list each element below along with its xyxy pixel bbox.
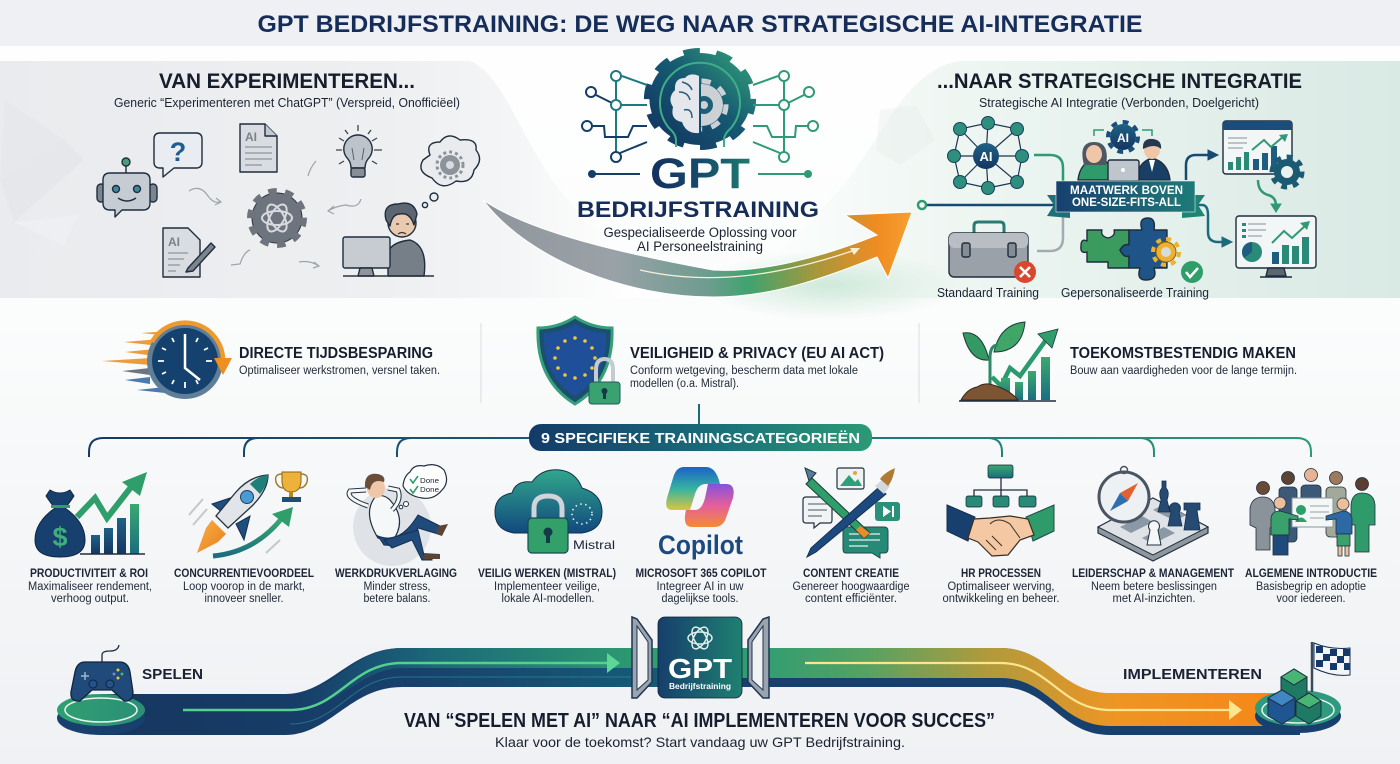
- heading: naar strategische integratie: ...NAAR STRATEGISCHE INTEGRATIE: [937, 70, 1302, 93]
- label: content creatie: CONTENT CREATIE: [803, 568, 899, 580]
- heading: veiligheid & privacy: VEILIGHEID & PRIVACY (EU AI ACT): [630, 345, 884, 362]
- text: veilig werken mistral: lokale AI-modellen.: [502, 593, 594, 605]
- label: algemene introductie: ALGEMENE INTRODUCTIE: [1245, 568, 1377, 580]
- icon: speech bubble: [154, 133, 202, 177]
- logo text: GPT: GPT: [650, 150, 750, 198]
- icon: document with pen: [163, 228, 215, 277]
- text: productiviteit & ROI: Maximaliseer rendement,: [28, 581, 152, 593]
- icon: org chart and handshake: [947, 465, 1054, 556]
- text: algemene introductie: voor iedereen.: [1276, 593, 1346, 605]
- category: hr processen: [942, 465, 1060, 605]
- platform: start: [57, 694, 145, 735]
- icon: blocks and flag: [1268, 642, 1350, 724]
- closing call to action: Klaar voor de toekomst? Start vandaag uw GPT Bedrijfstraining.: [495, 734, 905, 750]
- text: werkdrukverlaging: Minder stress,: [364, 581, 430, 593]
- title: GPT BEDRIJFSTRAINING: DE WEG NAAR STRATEGISCHE AI-INTEGRATIE: [258, 11, 1142, 38]
- gate panel: GPT: [668, 653, 732, 684]
- text: content creatie: [792, 581, 910, 605]
- banner: 9 specifieke trainingscategorieen: [529, 424, 872, 451]
- category: veilig werken mistral: [478, 470, 616, 605]
- gate: GPT bedrijfstraining: [632, 617, 769, 698]
- text: veiligheid & privacy: modellen (o.a. Mistral).: [630, 378, 739, 390]
- label: werkdrukverlaging: WERKDRUKVERLAGING: [335, 568, 457, 580]
- text: microsoft 365 copilot: Integreer AI in uw: [656, 581, 744, 593]
- banner: maatwerk boven one-size-fits-all: ONE-SIZE-FITS-ALL: [1072, 197, 1181, 209]
- icon: EU shield with lock: [538, 317, 620, 404]
- icon: dashboard with gear: [1223, 121, 1302, 187]
- banner: maatwerk boven one-size-fits-all: [1047, 181, 1205, 218]
- text: veilig werken mistral: Implementeer veilige,: [494, 581, 600, 593]
- icon: money bag with chart: $: [52, 522, 68, 552]
- label: leiderschap & management: LEIDERSCHAP & MANAGEMENT: [1072, 568, 1234, 580]
- icon: toolbox with cross: [949, 222, 1036, 283]
- category: content creatie: [792, 468, 910, 605]
- gate panel: Bedrijfstraining: [669, 682, 731, 691]
- text: werkdrukverlaging: betere balans.: [364, 593, 430, 605]
- logo tagline: Gespecialiseerde Oplossing voor: [604, 225, 797, 240]
- icon: group of people: [1250, 468, 1375, 556]
- text: productiviteit & ROI: verhoog output.: [51, 593, 129, 605]
- text: productiviteit & ROI: [28, 581, 152, 605]
- heading: toekomstbestendig maken: TOEKOMSTBESTENDIG MAKEN: [1070, 345, 1296, 362]
- benefits row: [102, 317, 1297, 404]
- label: productiviteit & ROI: PRODUCTIVITEIT & ROI: [30, 568, 148, 580]
- arrow: from experiment to integration: [483, 200, 912, 297]
- icon: team with AI gear: [1078, 122, 1170, 181]
- category: productiviteit & ROI: [28, 472, 152, 605]
- category: algemene introductie: [1245, 468, 1377, 605]
- text: concurrentievoordeel: innoveer sneller.: [204, 593, 284, 605]
- logo tagline: [604, 225, 797, 254]
- icon: AI network: AI: [980, 149, 992, 164]
- icon: puzzle with gear and check: [1081, 218, 1203, 283]
- text: copilot wordmark: Copilot: [658, 530, 743, 560]
- track: right segment: [740, 648, 1300, 735]
- icon: plant with growth chart: [959, 322, 1058, 401]
- logo: GPT Bedrijfstraining: [577, 51, 819, 254]
- text: directe tijdsbesparing: Optimaliseer werkstromen, versnel taken.: [239, 365, 440, 377]
- bottom dots: [588, 170, 812, 178]
- text: hr processen: [942, 581, 1060, 605]
- label: hr processen: HR PROCESSEN: [961, 568, 1041, 580]
- logo tagline: AI Personeelstraining: [637, 239, 763, 254]
- icon: AI document: [240, 124, 277, 172]
- connector lines: [918, 155, 1063, 251]
- icon: AI network: [948, 116, 1028, 194]
- icon: clock: [102, 323, 232, 399]
- decorative motion arrows: [189, 161, 361, 268]
- track: left segment: [101, 648, 660, 735]
- connector tree: [89, 404, 1311, 457]
- icon: team with AI gear: AI: [1117, 131, 1129, 145]
- label: implementeren: IMPLEMENTEREN: [1123, 666, 1262, 683]
- icon: central gear: [250, 191, 304, 245]
- label: concurrentievoordeel: CONCURRENTIEVOORDEEL: [174, 568, 314, 580]
- icon: cloud with lock: Mistral: [573, 538, 615, 552]
- icon: document with pen: AI: [168, 235, 180, 249]
- text: veilig werken mistral: [494, 581, 600, 605]
- circuit lines right: [753, 71, 818, 162]
- label: standaard training: Standaard Training: [937, 286, 1039, 300]
- icon: light bulb: [336, 125, 382, 177]
- icon: compass and chess: [1098, 466, 1208, 561]
- logo text: bedrijfstraining: BEDRIJFSTRAINING: [577, 197, 819, 222]
- gate door right: [748, 617, 769, 698]
- label: veilig werken mistral: VEILIG WERKEN (MISTRAL): [478, 568, 616, 580]
- label: gepersonaliseerde training: Gepersonaliseerde Training: [1061, 286, 1209, 300]
- panel: naar strategische integratie: [700, 61, 1400, 320]
- text: hr processen: ontwikkeling en beheer.: [942, 593, 1060, 605]
- text: concurrentievoordeel: Loop voorop in de markt,: [183, 581, 305, 593]
- text: content creatie: Genereer hoogwaardige: [792, 581, 910, 593]
- icon: monitor with charts: [1236, 216, 1316, 277]
- platform: finish: [1255, 690, 1341, 733]
- text: content creatie: content efficiënter.: [805, 593, 897, 605]
- text: microsoft 365 copilot: dagelijkse tools.: [662, 593, 738, 605]
- text: leiderschap & management: [1091, 581, 1217, 605]
- text: werkdrukverlaging: [364, 581, 430, 605]
- text: leiderschap & management: met AI-inzichten.: [1112, 593, 1196, 605]
- category: microsoft 365 copilot: [636, 467, 766, 605]
- category: leiderschap & management: [1072, 466, 1234, 605]
- icon: robot: [97, 158, 157, 217]
- text: hr processen: Optimaliseer werving,: [948, 581, 1054, 593]
- circuit lines left: [582, 71, 647, 162]
- panel: van experimenteren: [0, 61, 660, 298]
- journey track: [57, 617, 1350, 735]
- icon: relaxed person: Done: [420, 476, 439, 485]
- subheading: experimenteren: Generic “Experimenteren met ChatGPT” (Verspreid, Onofficiëel): [114, 95, 460, 110]
- text: toekomstbestendig maken: Bouw aan vaardigheden voor de lange termijn.: [1070, 365, 1297, 377]
- text: veiligheid & privacy: [630, 365, 858, 390]
- icon: creative tools: [803, 468, 900, 558]
- heading: van experimenteren: VAN EXPERIMENTEREN...: [159, 70, 415, 93]
- icon: speech bubble: ?: [170, 137, 186, 167]
- gate panel: [658, 617, 742, 698]
- text: algemene introductie: Basisbegrip en adoptie: [1256, 581, 1366, 593]
- text: veiligheid & privacy: Conform wetgeving, bescherm data met lokale: [630, 365, 858, 377]
- text: algemene introductie: [1256, 581, 1366, 605]
- icon: AI document: AI: [245, 130, 257, 144]
- text: concurrentievoordeel: [183, 581, 305, 605]
- closing headline: VAN “SPELEN MET AI” NAAR “AI IMPLEMENTEREN VOOR SUCCES”: [404, 710, 995, 732]
- icon: game controller: [71, 645, 133, 701]
- icon: relaxed person: [349, 465, 448, 566]
- icon: relaxed person: Done: [420, 485, 439, 494]
- banner: 9 specifieke trainingscategorieen: 9 SPECIFIEKE TRAININGSCATEGORIEËN: [541, 430, 860, 447]
- text: leiderschap & management: Neem betere beslissingen: [1091, 581, 1217, 593]
- label: spelen: SPELEN: [142, 666, 203, 683]
- banner: maatwerk boven one-size-fits-all: MAATWERK BOVEN: [1070, 185, 1183, 197]
- category: werkdrukverlaging: [335, 465, 457, 605]
- icon: rocket and trophy: [189, 472, 307, 556]
- icon: thought cloud: [421, 136, 480, 208]
- arrows to dashboards: [1186, 150, 1281, 247]
- subheading: strategische ai integratie: Strategische AI Integratie (Verbonden, Doelgericht): [979, 95, 1259, 110]
- label: microsoft 365 copilot: MICROSOFT 365 COPILOT: [636, 568, 766, 580]
- category: concurrentievoordeel: [174, 472, 314, 605]
- icon: copilot logo: [666, 467, 734, 527]
- icon: gear with brain: [647, 51, 753, 147]
- text: microsoft 365 copilot: [656, 581, 744, 605]
- heading: directe tijdsbesparing: DIRECTE TIJDSBESPARING: [239, 345, 433, 362]
- icon: person at computer: [343, 203, 434, 276]
- gate door left: [632, 617, 652, 698]
